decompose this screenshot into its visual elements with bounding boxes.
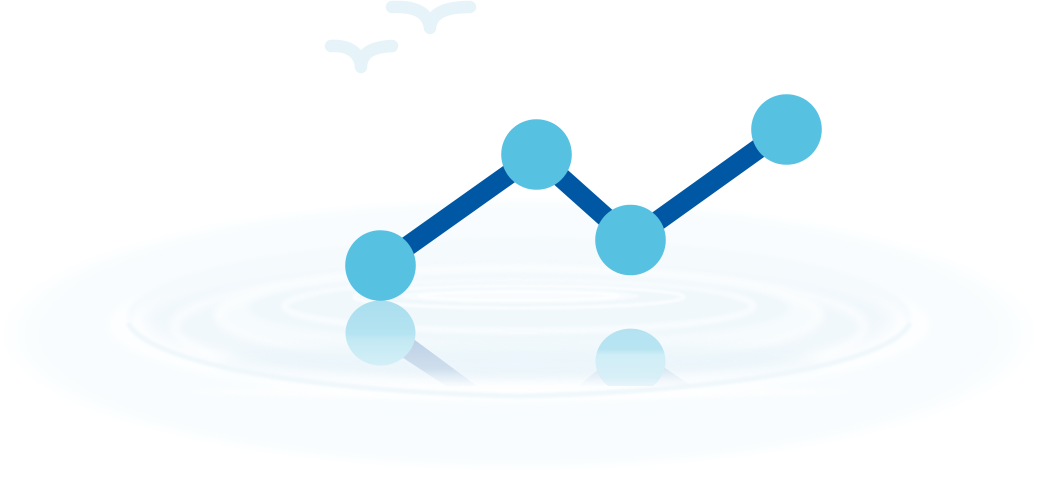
data point 3 (595, 205, 666, 275)
bird: top right (392, 7, 470, 28)
data point 2 (501, 119, 572, 190)
reflection of point 3 (596, 329, 666, 386)
chart line (381, 129, 786, 265)
data point 1 (345, 230, 416, 301)
bird: lower left (331, 46, 392, 67)
line chart (345, 94, 822, 301)
reflection of point 1 (346, 300, 416, 366)
reflection of line segments (385, 329, 692, 386)
water ripples (0, 197, 1038, 471)
data point 4 (751, 94, 822, 165)
